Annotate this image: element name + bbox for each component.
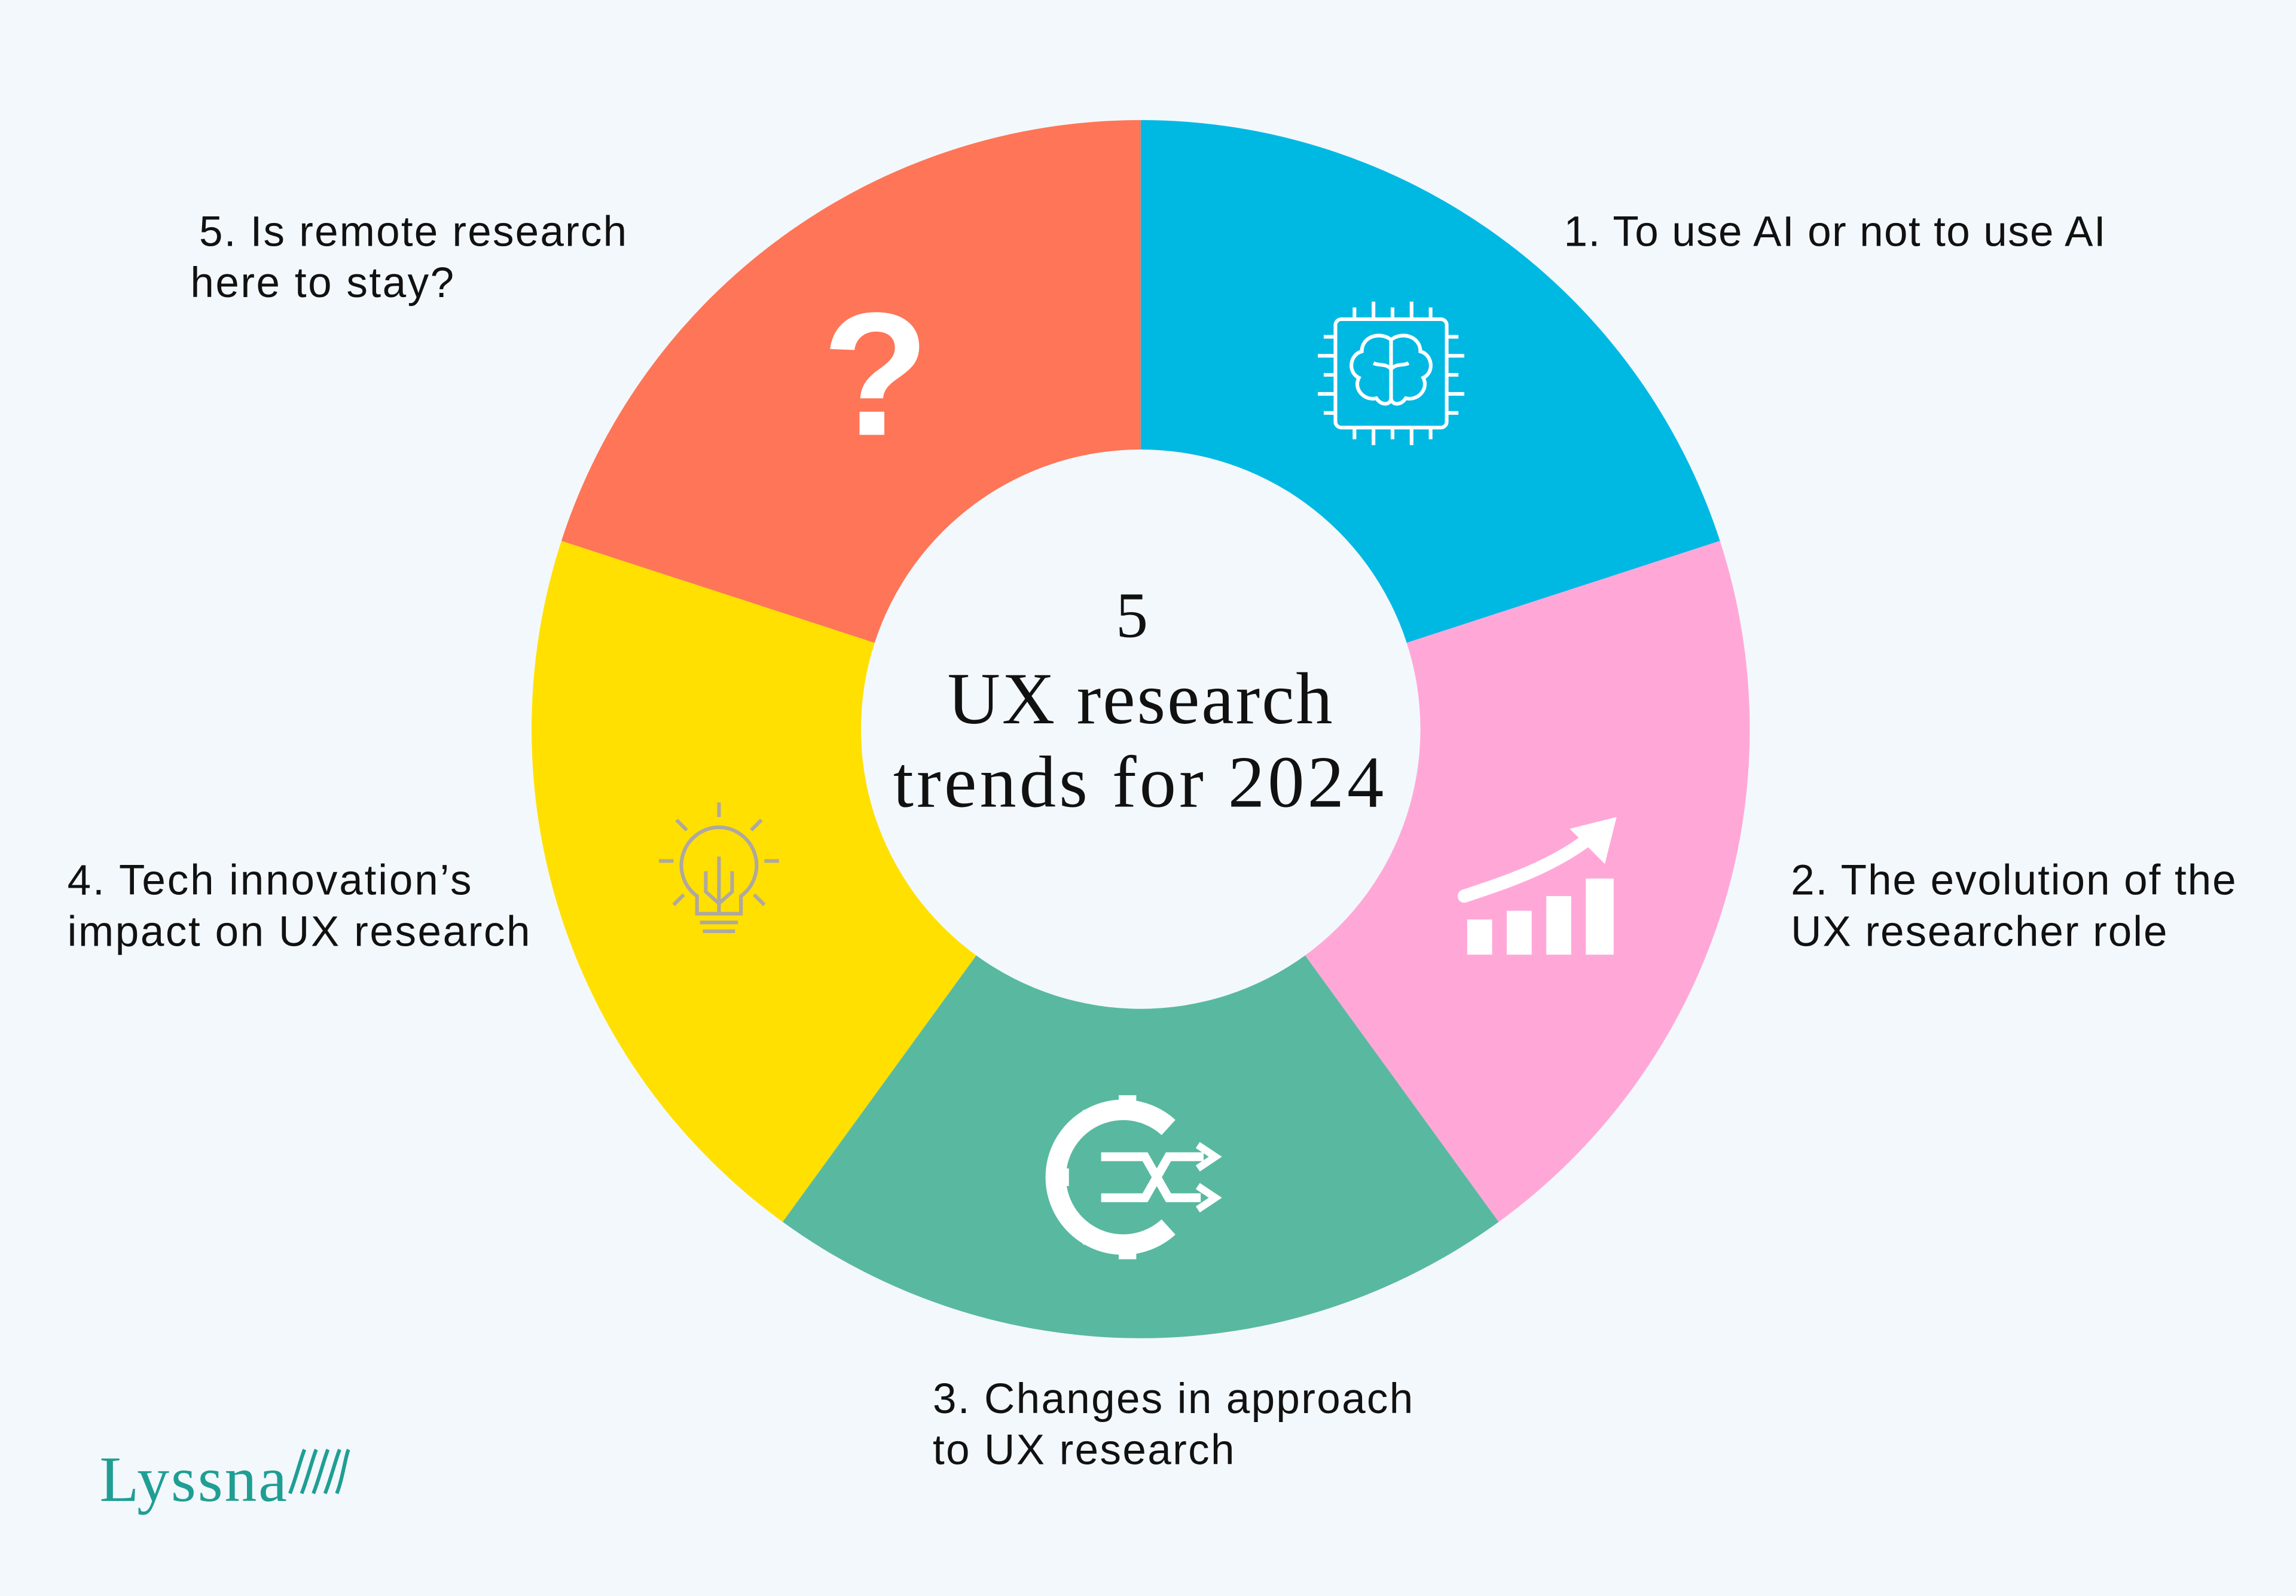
icon: gear with arrows xyxy=(1054,1095,1216,1259)
labels xyxy=(68,209,2236,1474)
center title: trends for 2024 xyxy=(893,742,1384,823)
segment 1 blue xyxy=(1141,120,1720,643)
center title: 5 xyxy=(1116,580,1148,652)
label 5 xyxy=(190,209,627,307)
donut chart xyxy=(532,120,1750,1338)
label 3 xyxy=(933,1375,1413,1474)
center title xyxy=(893,580,1384,823)
label 4: impact on UX research xyxy=(68,908,530,955)
icon: AI brain chip xyxy=(1318,302,1464,445)
label 3: 3. Changes in approach xyxy=(933,1375,1413,1423)
icon: rising chart xyxy=(1464,817,1617,955)
icon: light bulb xyxy=(659,802,779,931)
label 3: to UX research xyxy=(933,1427,1234,1474)
label 2 xyxy=(1791,857,2236,955)
label 4 xyxy=(68,857,530,955)
label 4: 4. Tech innovation’s xyxy=(68,857,472,904)
icon: question mark: ? xyxy=(822,276,929,473)
label 5: 5. Is remote research xyxy=(199,209,627,256)
label 2: UX researcher role xyxy=(1791,908,2167,955)
label 2: 2. The evolution of the xyxy=(1791,857,2236,904)
segment 2 pink xyxy=(1305,541,1750,1222)
segment 3 green xyxy=(783,955,1499,1338)
label 5: here to stay? xyxy=(190,259,454,307)
segment 5 orange xyxy=(561,120,1141,643)
center title: UX research xyxy=(947,659,1333,739)
label 1: 1. To use AI or not to use AI xyxy=(1564,209,2106,256)
segment 4 yellow xyxy=(532,541,976,1222)
logo: Lyssna: Lyssna xyxy=(100,1444,287,1515)
